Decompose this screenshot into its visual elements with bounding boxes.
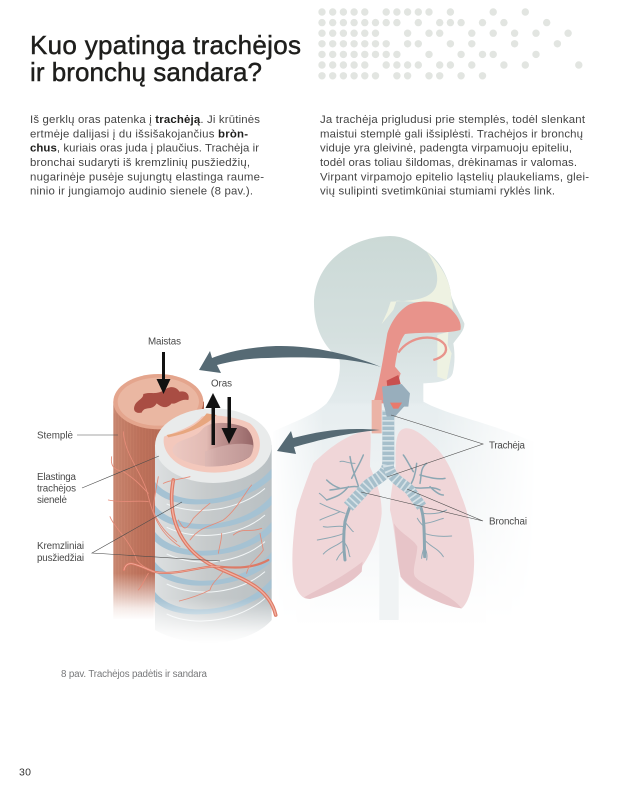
text block: left column: nugarinėje pusėje sujungtų elastinga raume- [30,171,264,183]
larynx red accent [390,403,402,409]
lumen floor [205,444,253,467]
lower face [437,332,452,380]
right bronchial tree [403,455,452,560]
oesophagus bottom cover [110,619,155,635]
text block: left column [30,114,264,198]
decorative dot pattern [318,8,582,80]
trachea and bronchi rings [348,410,422,507]
leader lines [77,415,483,561]
skull bone [382,252,453,324]
text block: right column: Ja trachėja prigludusi prie stemplės, todėl slenkant [320,114,586,126]
trachea lumen [173,423,253,466]
trachea bottom cover [153,642,275,652]
title: Kuo ypatinga trachėjos [30,30,301,60]
spine [379,487,399,620]
text block: left column: Iš gerklų oras patenka į trachėją. Ji krūtinės [30,114,260,126]
arrow: food [156,352,170,394]
arrow: air out [206,393,220,445]
label: Oras: Oras [211,378,232,390]
title: ir bronchų sandara? [30,57,262,87]
arrow: from trachea to cross-section [277,429,380,454]
arrow: air in [222,397,237,444]
label: Elastinga trachėjos sienelė: Elastinga [37,472,77,483]
label: Trachėja: Trachėja [489,440,526,452]
text block: right column [320,114,589,198]
pink inner wall [164,415,260,473]
left lung shaded base [304,562,363,599]
orange connective tissue [167,413,217,437]
text block: right column: todėl oras toliau šildomas, drėkinamas ir valomas. [320,157,577,169]
text block: left column: ninio ir jungiamojo audinio sienele (8 pav.). [30,186,253,198]
text block: right column: maistui stemplė gali išsiplėsti. Trachėjos ir bronchų [320,128,583,140]
oesophagus strip [372,400,382,433]
right lung [390,428,474,608]
nasal cavity and pharynx [373,302,461,403]
trachea top face [155,408,272,483]
text block: right column: vių sulipinti svetimkūniai stumiami ryklės link. [320,186,555,198]
label: Elastinga trachėjos sienelė: trachėjos [37,484,76,494]
label: Kremzliniai pusžiedžiai: Kremzliniai [37,541,84,552]
label: Maistas: Maistas [148,336,181,348]
illustration: oesophagus and trachea cross-section [108,374,276,652]
illustration: lungs and airways [292,400,474,620]
label: Kremzliniai pusžiedžiai: pusžiedžiai [37,553,84,564]
left lung [292,430,382,599]
label: Bronchai: Bronchai [489,516,527,528]
head silhouette [314,236,464,403]
label: Kremzliniai pusžiedžiai [37,541,84,564]
text block: left column: bronchai sudaryti iš kremzlinių pusžiedžių, [30,157,250,169]
oesophagus lumen [134,387,189,413]
text block: right column: Virpant virpamojo epitelio ląstelių plaukeliams, glei- [320,171,589,183]
oesophagus top face [113,374,203,429]
label: Elastinga trachėjos sienelė: sienelė [37,495,68,506]
text block: left column: chus, kuriais oras juda į plaučius. Trachėja ir [30,143,259,155]
trachea tube [155,445,272,643]
text block: right column: viduje yra gleivinė, padengta virpamuoju epiteliu, [320,143,572,155]
oesophagus tube [113,402,204,630]
text block: left column: ertmėje dalijasi į du išsišakojančius bròn- [30,128,248,140]
larynx lower part [383,400,406,417]
illustration: body silhouette with shoulders [290,402,498,556]
tongue and palate arc [398,338,446,360]
illustration: head profile [314,236,464,407]
right lung shaded lobe [394,523,462,608]
blood vessels [108,432,276,615]
figure caption: 8 pav. Trachėjos padėtis ir sandara [61,669,208,680]
arrow: from throat to oesophagus [199,346,381,373]
label: Elastinga trachėjos sienelė [37,472,77,506]
title [30,30,301,87]
cartilage rings and blue gaps [155,469,272,621]
oesophagus bottom fade [110,573,157,620]
left bronchial tree [317,455,363,560]
larynx [387,375,401,387]
label: Stemplė: Stemplė [37,430,74,442]
page number: 30 [19,766,31,778]
trachea bottom fade [153,598,275,643]
